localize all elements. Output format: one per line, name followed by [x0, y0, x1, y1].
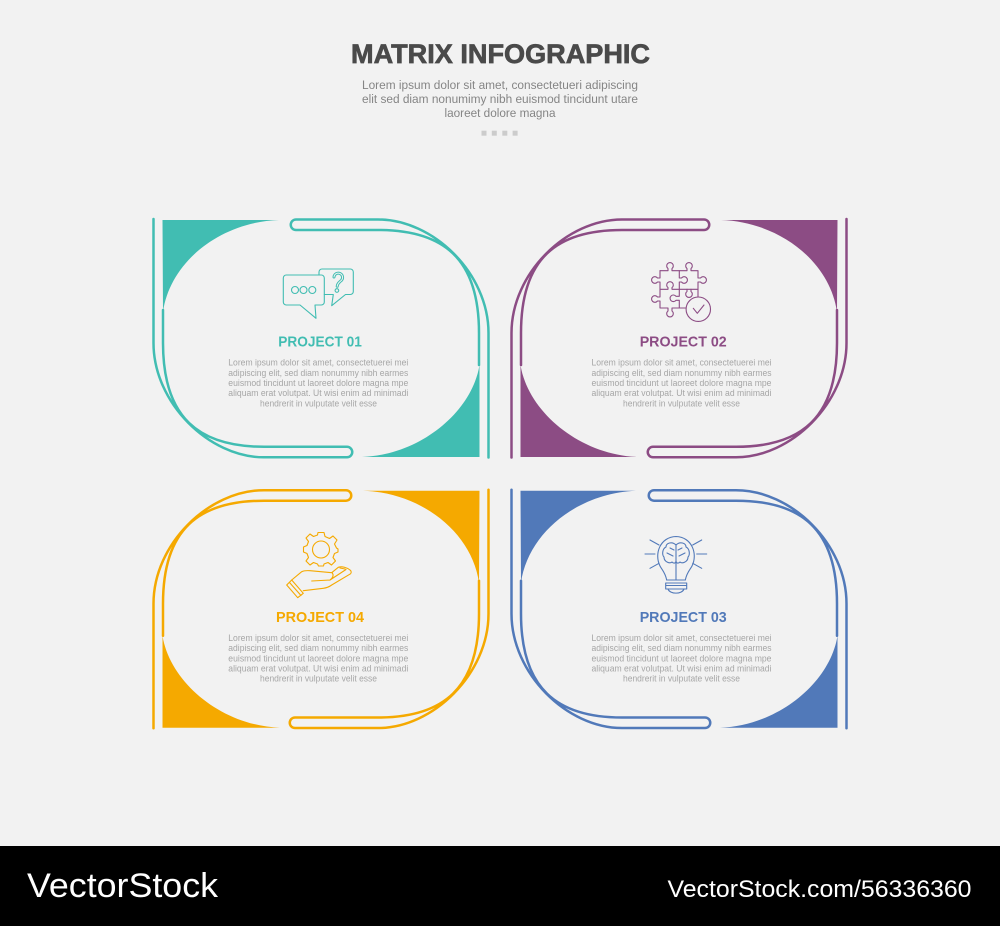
icon: puzzle with check: [652, 263, 710, 321]
panel frame and corner fills: [154, 490, 488, 728]
body text: euismod tincidunt ut laoreet dolore magna mpe: [592, 653, 772, 663]
icon: light bulb with brain: [645, 536, 707, 593]
pagination dots: [482, 131, 518, 136]
body text: Lorem ipsum dolor sit amet, consectetuerei mei: [592, 633, 772, 643]
body text: hendrerit in vulputate velit esse: [260, 674, 377, 684]
heading: PROJECT 03: [640, 610, 727, 626]
body text: Lorem ipsum dolor sit amet, consectetuerei mei: [592, 358, 772, 368]
body text: adipiscing elit, sed diam nonummy nibh earmes: [592, 643, 772, 653]
body text: adipiscing elit, sed diam nonummy nibh earmes: [592, 368, 772, 378]
title: MATRIX INFOGRAPHIC: [351, 39, 650, 69]
body text: hendrerit in vulputate velit esse: [260, 398, 377, 408]
panel frame and corner fills: [512, 490, 846, 728]
panel frame and corner fills: [154, 219, 488, 458]
subtitle text block: Lorem ipsum dolor sit amet, consectetueri adipiscing: [362, 78, 638, 92]
body text: adipiscing elit, sed diam nonummy nibh earmes: [228, 368, 409, 378]
icon: hand holding gear: [287, 532, 351, 598]
body text: hendrerit in vulputate velit esse: [623, 674, 740, 684]
heading: PROJECT 02: [640, 335, 727, 351]
panel: project 02: [512, 219, 846, 458]
body text: euismod tincidunt ut laoreet dolore magna mpe: [228, 378, 408, 388]
body text: aliquam erat volutpat. Ut wisi enim ad minimadi: [592, 388, 772, 398]
subtitle text block: [362, 78, 638, 120]
panel: project 01: [154, 219, 488, 458]
body text: [592, 633, 772, 684]
body text: aliquam erat volutpat. Ut wisi enim ad minimadi: [228, 664, 408, 674]
subtitle text block: elit sed diam nonumimy nibh euismod tincidunt utare: [362, 92, 638, 106]
icon: speech bubbles: [283, 269, 353, 318]
footer watermark bar: [0, 846, 1000, 926]
body text: Lorem ipsum dolor sit amet, consectetuerei mei: [228, 633, 408, 643]
footer watermark bar: VectorStock: [27, 867, 219, 905]
body text: adipiscing elit, sed diam nonummy nibh earmes: [228, 643, 409, 653]
panel frame and corner fills: [512, 219, 846, 458]
footer watermark bar: VectorStock.com/56336360: [668, 876, 972, 903]
body text: [228, 633, 409, 684]
body text: Lorem ipsum dolor sit amet, consectetuerei mei: [228, 358, 408, 368]
body text: hendrerit in vulputate velit esse: [623, 398, 740, 408]
heading: PROJECT 04: [276, 610, 365, 626]
panel: project 04: [154, 490, 488, 728]
body text: [228, 358, 409, 408]
body text: aliquam erat volutpat. Ut wisi enim ad minimadi: [592, 664, 772, 674]
body text: euismod tincidunt ut laoreet dolore magna mpe: [228, 653, 408, 663]
body text: euismod tincidunt ut laoreet dolore magna mpe: [592, 378, 772, 388]
body text: aliquam erat volutpat. Ut wisi enim ad minimadi: [228, 388, 408, 398]
panel: project 03: [512, 490, 846, 728]
heading: PROJECT 01: [278, 335, 362, 351]
body text: [592, 358, 772, 408]
subtitle text block: laoreet dolore magna: [444, 106, 556, 120]
